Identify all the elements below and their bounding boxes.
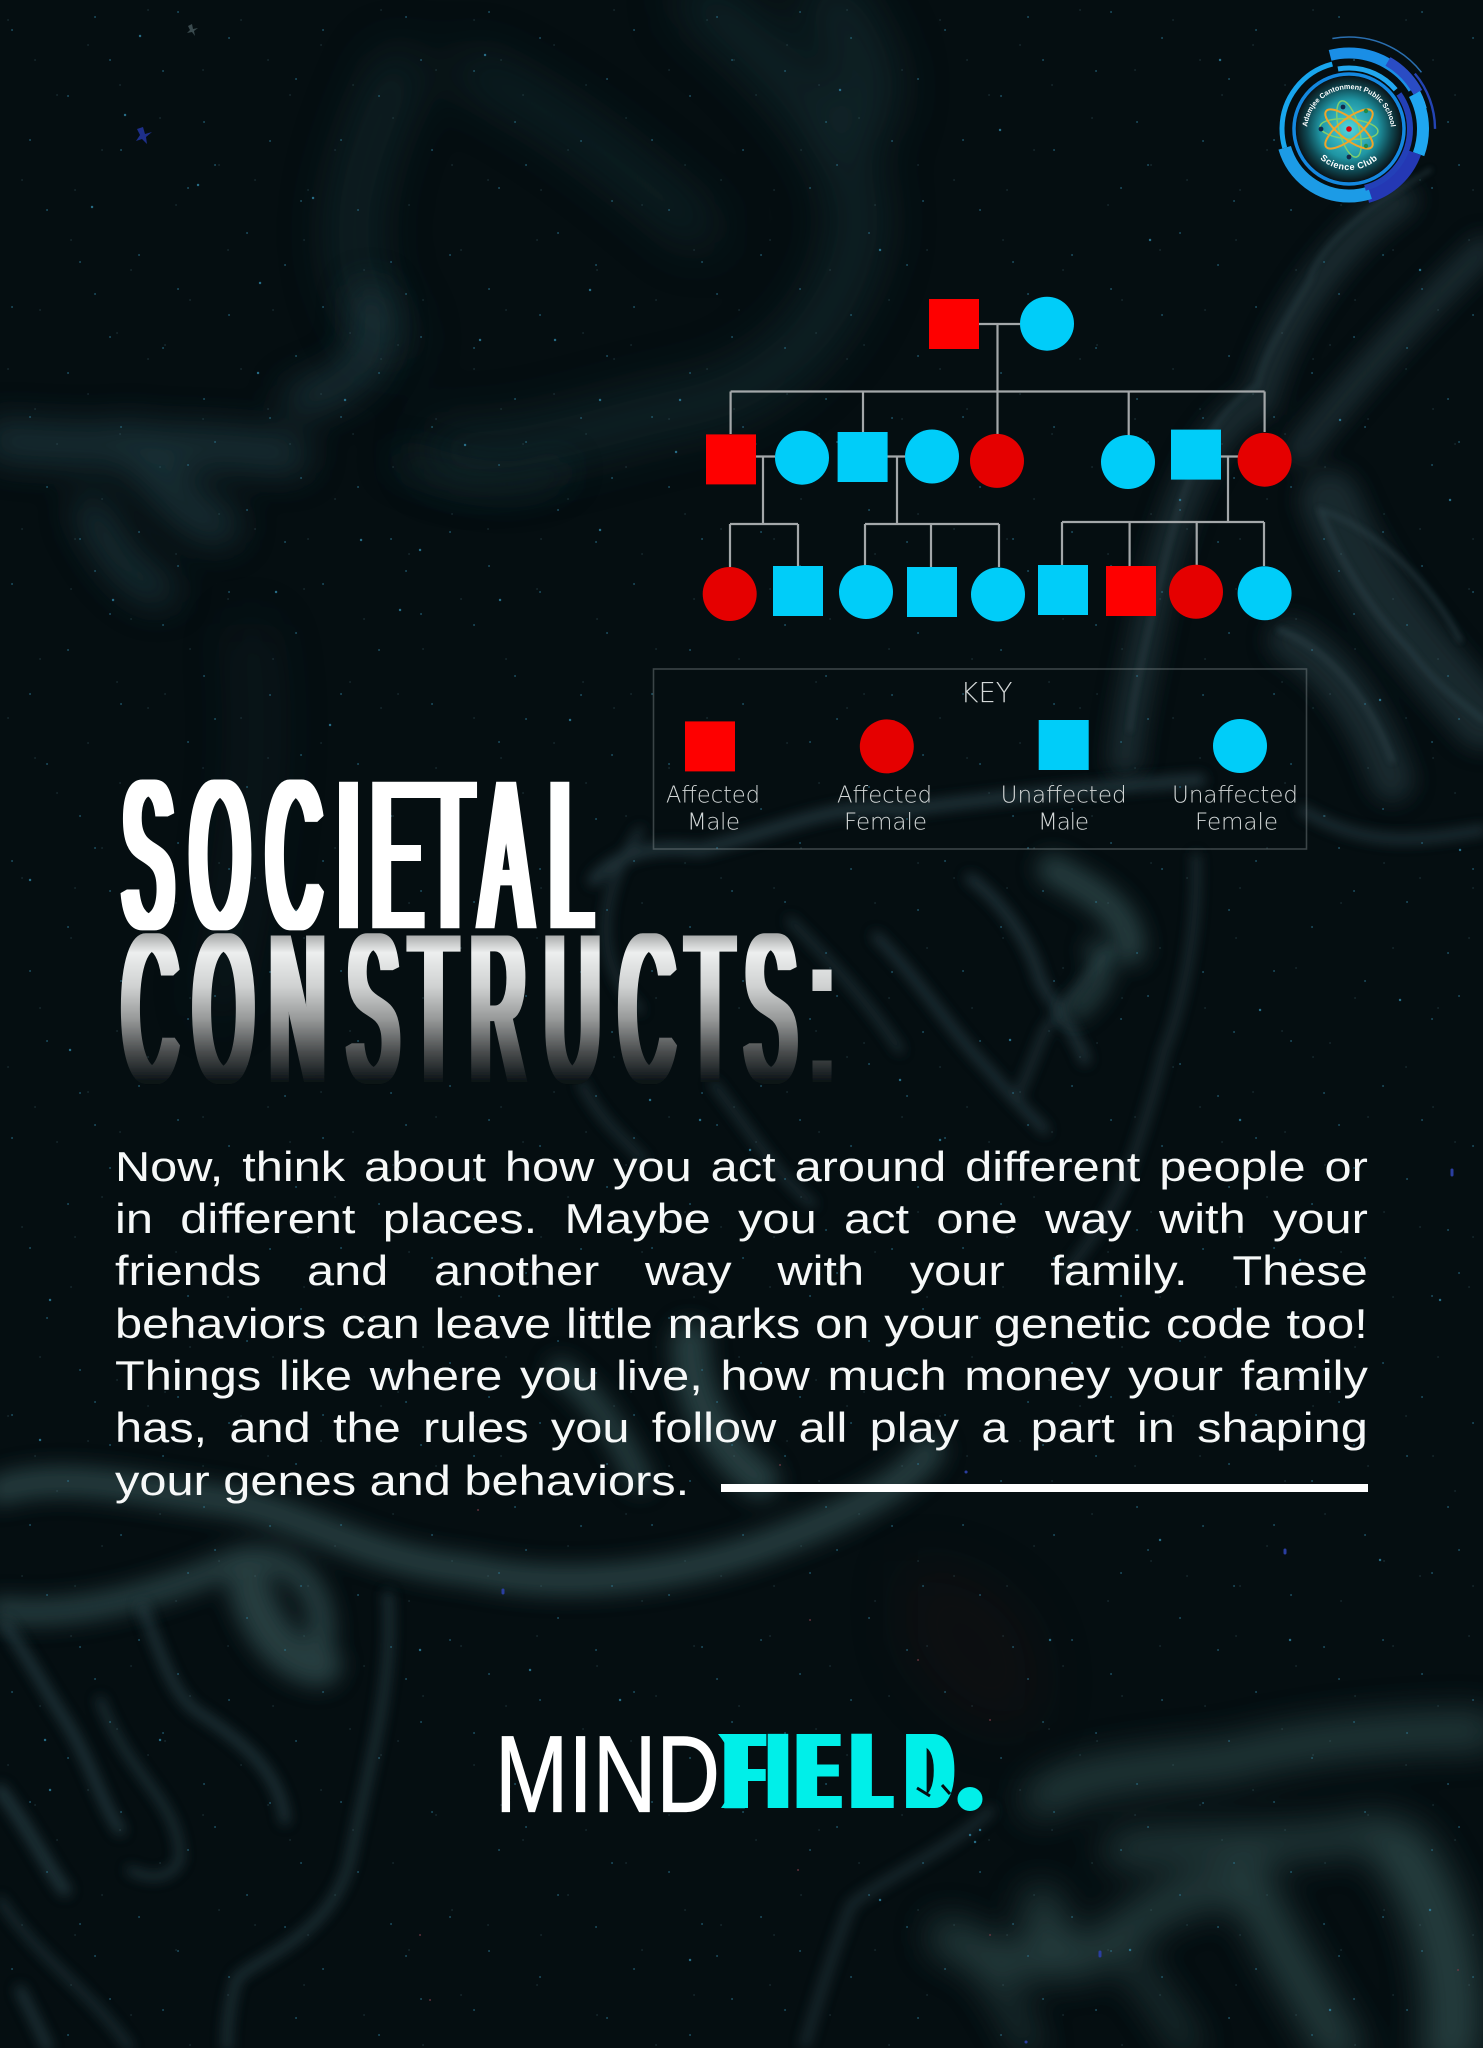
generation III: [703, 565, 1292, 622]
pedigree chart: [703, 297, 1292, 622]
legend: unaffected male: Unaffected: [1001, 782, 1127, 808]
legend: unaffected male: Male: [1038, 810, 1089, 836]
legend: affected female: Affected: [837, 782, 932, 808]
legend: affected male: [666, 721, 760, 836]
body text: Now, think about how you act around different people or: [115, 1142, 1368, 1190]
body text: in different places. Maybe you act one way with your: [115, 1195, 1368, 1242]
legend: key box: [654, 669, 1306, 849]
legend: affected male: Male: [687, 810, 740, 836]
title line 1: SOCIETAL: [123, 736, 592, 974]
pedigree connector lines: [730, 324, 1265, 567]
body text: behaviors can leave little marks on your genetic code too!: [115, 1300, 1368, 1347]
badge outer ring segments: [1257, 37, 1441, 221]
body text: Things like where you live, how much money your family: [115, 1352, 1368, 1399]
badge: Science Club logo: [1278, 36, 1436, 203]
badge atom symbol: [1319, 98, 1379, 160]
badge text: Adamjee Cantonment Public School: [1302, 85, 1396, 127]
logo crescent of F: [718, 1734, 748, 1808]
legend: unaffected female: Unaffected: [1172, 782, 1298, 808]
title: Societal Constructs: [123, 736, 832, 1127]
legend: affected female: [837, 719, 932, 836]
legend: unaffected female: Female: [1195, 810, 1278, 836]
legend: unaffected female: [1172, 719, 1298, 836]
logo word: MIND: MIND: [495, 1714, 720, 1836]
badge: Science Club logo: Science Club: [1320, 154, 1377, 170]
logo satellite detail: [917, 1785, 950, 1796]
body text: has, and the rules you follow all play a part in shaping: [115, 1404, 1368, 1451]
generation II: [706, 430, 1292, 489]
body text: your genes and behaviors.: [115, 1457, 689, 1504]
body text: [115, 1142, 1368, 1504]
logo dot: [958, 1787, 982, 1811]
body text: friends and another way with your family. These: [115, 1247, 1368, 1294]
logo word: FIELD: FIELD: [726, 1711, 951, 1832]
closing rule: [721, 1484, 1368, 1492]
legend: affected female: Female: [844, 810, 927, 836]
logo: Mindfield: [495, 1711, 982, 1836]
legend: affected male: Affected: [666, 782, 760, 808]
title line 2: CONSTRUCTS:: [123, 890, 832, 1127]
legend title: KEY: [960, 676, 1012, 709]
generation I: [929, 297, 1074, 351]
legend: unaffected male: [1001, 720, 1127, 836]
